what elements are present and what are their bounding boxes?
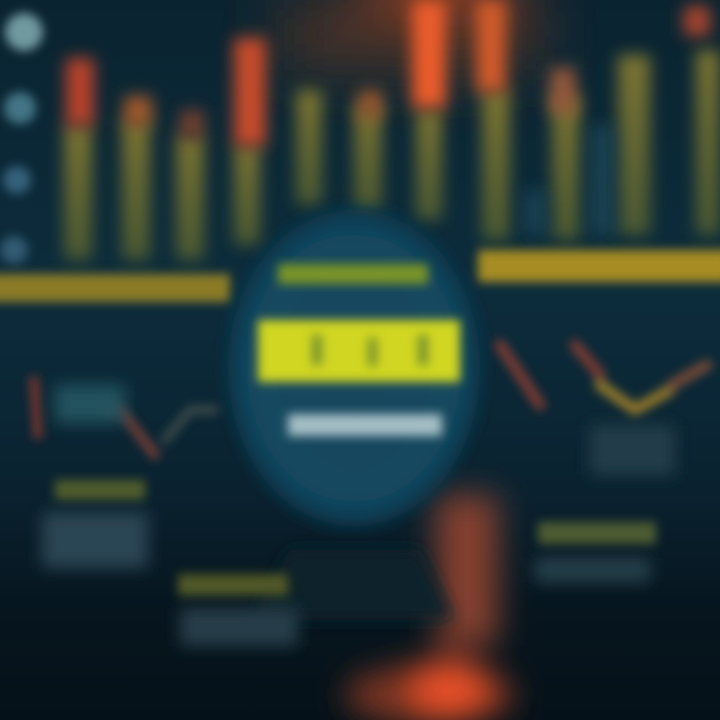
right line chart — [500, 345, 707, 410]
left axis dots — [0, 13, 43, 264]
left chart label — [55, 480, 145, 500]
central disc — [228, 210, 480, 620]
right label — [538, 522, 656, 544]
lower label — [178, 574, 288, 596]
right chart text — [590, 425, 675, 475]
left chart text — [42, 512, 148, 568]
lower orange glow — [345, 495, 515, 720]
left chart panel — [55, 385, 125, 423]
disc dark stand — [250, 550, 455, 620]
headline texture — [312, 335, 428, 366]
top orange glow — [280, 0, 540, 75]
top heading block — [278, 264, 428, 284]
bar caps — [66, 0, 710, 146]
bar chart — [64, 0, 720, 260]
left line chart — [34, 380, 215, 455]
white caption block — [288, 414, 442, 436]
secondary blue columns — [524, 125, 614, 235]
yellow band left — [0, 274, 230, 302]
lower text — [180, 608, 298, 646]
yellow band right — [478, 250, 720, 282]
main yellow headline block — [258, 320, 460, 382]
bar stems — [64, 50, 720, 260]
right text — [535, 558, 650, 582]
